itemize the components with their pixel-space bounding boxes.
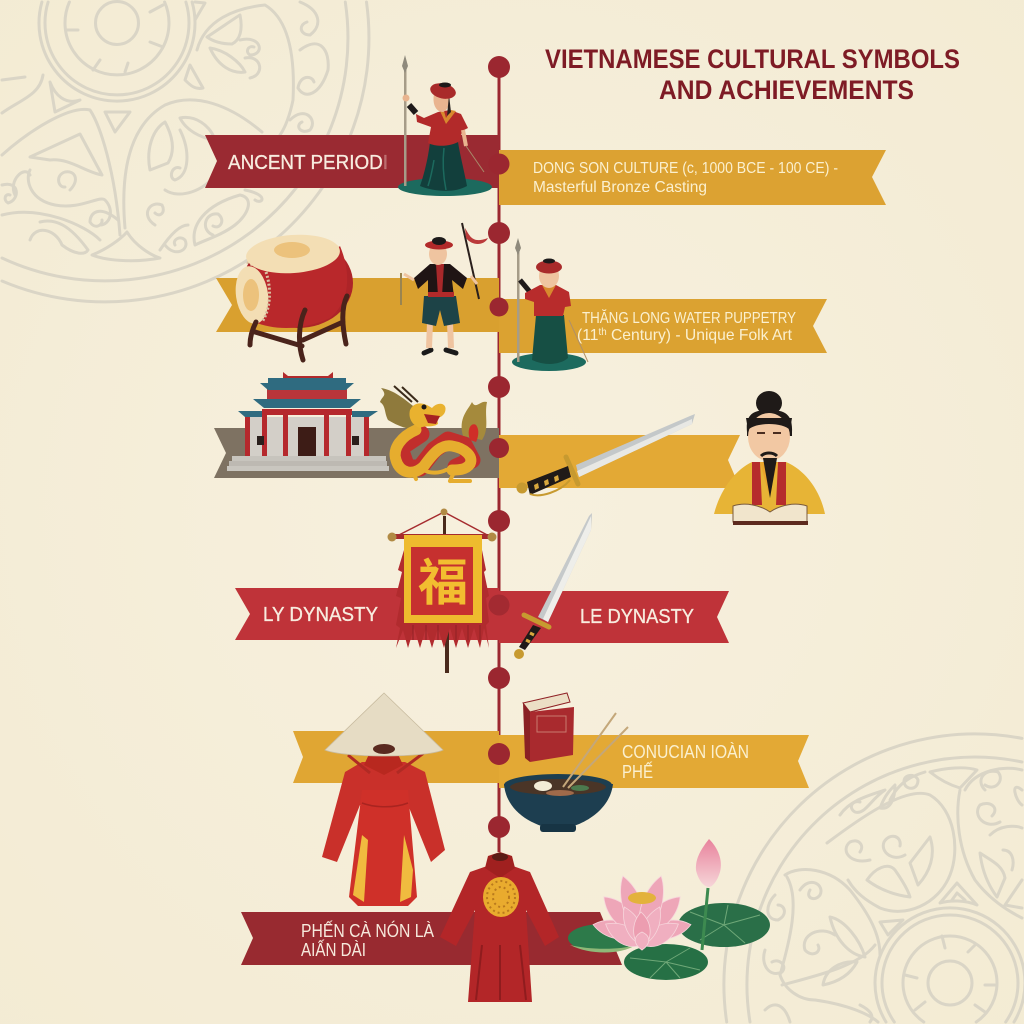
icon: golden dragon [380, 386, 487, 481]
banner: confucian [488, 735, 809, 788]
icon: banner with fu character: 福 [418, 543, 468, 615]
icon: temple [227, 372, 389, 471]
icon: spear puppet on right [512, 238, 588, 371]
icon: ao dai with conical hat [322, 693, 445, 906]
banner: le dynasty: LE DYNASTY [580, 606, 694, 628]
timeline spine with nodes [488, 56, 510, 852]
icon: boy puppet with flag [401, 223, 488, 353]
banner: gold row three [489, 435, 740, 488]
banner: left gold row five [293, 731, 499, 783]
icon: red robe with medallion [440, 852, 559, 1002]
title [545, 44, 960, 105]
banner: thang long water puppetry: Century) - Unique Folk Art [607, 327, 793, 344]
icon: sabre [516, 414, 695, 495]
banner: thang long water puppetry: THĂNG LONG WATER PUPPETRY [582, 308, 796, 327]
banner: dong son culture: Masterful Bronze Casting [533, 179, 707, 196]
banner: thang long water puppetry: (11 [577, 327, 599, 344]
mandala: top left [2, 2, 369, 302]
icon: spear puppet on stand [398, 55, 492, 196]
banner: confucian: PHẾ [622, 761, 653, 782]
icon: bronze drum [232, 232, 353, 360]
banner: ly dynasty [235, 588, 499, 640]
banner: ancient period [205, 135, 499, 188]
icon: scholar reading [714, 391, 825, 525]
banner: confucian: CONUCIAN IOÀN [622, 742, 749, 762]
banner: le dynasty [488, 591, 729, 643]
banner: non la and ao dai: PHẾN CÀ NÓN LÀ [301, 920, 434, 941]
banner: thang long water puppetry [490, 298, 827, 353]
banner: non la and ao dai: AIẤN DÀI [301, 939, 366, 960]
title: VIETNAMESE CULTURAL SYMBOLS [545, 44, 960, 74]
banner: non la and ao dai [241, 912, 622, 965]
banner: ancient period: ANCENT PERIODI [228, 152, 388, 174]
banner: dong son culture: DONG SON CULTURE (c, 1000 BCE - 100 CE) - [533, 160, 838, 177]
icon: lotus flower and leaves [568, 839, 770, 980]
icon: red book [523, 693, 574, 762]
conical hat [325, 693, 443, 756]
icon: pho bowl with chopsticks [504, 713, 628, 832]
banner: dong son culture [488, 150, 886, 205]
icon: straight sword [514, 513, 592, 659]
banner: thang long water puppetry: th [598, 327, 607, 338]
banner: left gold row two [216, 278, 499, 332]
title: AND ACHIEVEMENTS [659, 75, 914, 105]
mandala: bottom right [724, 734, 1024, 1022]
banner: gray row three [214, 428, 499, 478]
icon: banner with fu character [388, 508, 496, 673]
banner: ly dynasty: LY DYNASTY [263, 604, 378, 626]
